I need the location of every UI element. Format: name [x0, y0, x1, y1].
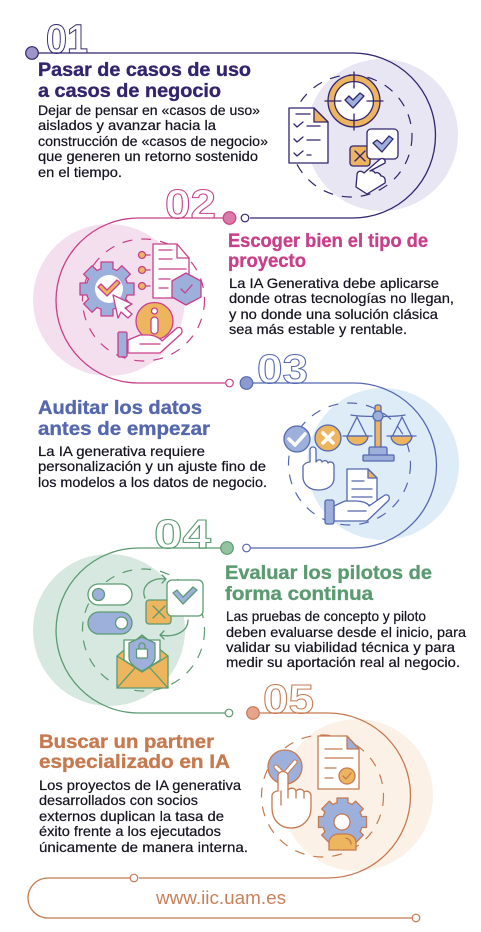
body text 5: únicamente de manera interna.: [39, 839, 248, 855]
body text 1: que generen un retorno sostenido: [38, 148, 258, 164]
end dot 3: [243, 544, 250, 552]
start dot 4: [221, 542, 233, 554]
body text 5: éxito frente a los ejecutados: [39, 823, 221, 839]
heading 3: [38, 397, 210, 440]
body text 5: desarrollados con socios: [39, 792, 198, 808]
body text 3: los modelos a los datos de negocio.: [38, 474, 267, 490]
panel: step 4: [33, 511, 466, 717]
body text 2: La IA Generativa debe aplicarse: [229, 275, 439, 291]
dashed ring 3: [288, 403, 410, 525]
icon: scales, approval buttons and document: [284, 405, 416, 524]
heading 2: [228, 230, 428, 272]
icon: target, checklist and hand: [289, 72, 398, 194]
heading 4: Evaluar los pilotos de: [225, 562, 432, 584]
connector line 4: [56, 548, 225, 713]
body text 4: Las pruebas de concepto y piloto: [226, 608, 426, 624]
body text 1: en el tiempo.: [38, 164, 122, 180]
frame dot left: [130, 874, 138, 882]
heading 1: [38, 59, 251, 102]
dashed ring 5: [262, 735, 384, 857]
body text 4: medir su aportación real al negocio.: [226, 654, 460, 670]
heading 2: proyecto: [228, 250, 306, 272]
background circle 5: [281, 719, 433, 871]
heading 2: Escoger bien el tipo de: [228, 230, 428, 252]
body text 4: validar su viabilidad técnica y para: [226, 639, 455, 655]
heading 4: [225, 562, 432, 605]
body text 1: Dejar de pensar en «casos de uso»: [38, 102, 260, 118]
heading 1: a casos de negocio: [38, 80, 221, 102]
body text 1: aislados y avanzar hacia la: [38, 117, 216, 133]
background circle 4: [33, 554, 185, 706]
body text 3: La IA generativa requiere: [38, 443, 205, 459]
icon: toggles, approval boxes and envelope: [88, 575, 203, 688]
number 04: 04: [154, 511, 211, 557]
panel: step 1: [26, 16, 458, 222]
number 01: 01: [46, 16, 88, 62]
end dot 2: [226, 379, 233, 387]
connector line 2: [56, 218, 225, 383]
connector line 1: [38, 53, 435, 218]
start dot 1: [26, 47, 38, 59]
body text 5: [39, 777, 248, 855]
number 05: 05: [263, 676, 314, 722]
heading 5: [39, 731, 230, 773]
background circle 3: [307, 388, 459, 540]
dashed ring 2: [82, 239, 204, 361]
dashed ring 4: [82, 569, 204, 691]
heading 1: Pasar de casos de uso: [38, 59, 251, 81]
start dot 3: [240, 377, 253, 389]
panel: step 3: [38, 346, 459, 552]
icon: pointing hand, document and gear: [268, 736, 366, 850]
website url: www.iic.uam.es: [155, 888, 286, 908]
body text 4: [226, 608, 466, 670]
heading 3: antes de empezar: [38, 418, 210, 440]
body text 1: construcción de «casos de negocio»: [38, 133, 268, 149]
body text 3: [38, 443, 267, 490]
frame dot right: [412, 914, 420, 922]
body text 4: deben evaluarse desde el inicio, para: [226, 624, 466, 640]
body text 1: [38, 102, 268, 180]
body text 2: sea más estable y rentable.: [229, 321, 407, 337]
panel: step 5: [39, 676, 433, 878]
frame line: [28, 878, 412, 918]
heading 4: forma continua: [225, 583, 373, 605]
start dot 2: [223, 212, 236, 224]
body text 2: [229, 275, 454, 337]
body text 2: donde otras tecnologías no llegan,: [229, 290, 454, 306]
connector line 3: [250, 383, 436, 548]
heading 5: especializado en IA: [39, 751, 230, 773]
background circle 1: [306, 59, 458, 211]
end dot 1: [241, 214, 249, 222]
number 02: 02: [165, 181, 216, 227]
heading 5: Buscar un partner: [39, 731, 214, 753]
body text 2: y no donde una solución clásica: [229, 306, 438, 322]
connector line 5: [139, 713, 410, 878]
footer: website frame: [28, 874, 420, 922]
heading 3: Auditar los datos: [38, 397, 202, 419]
panel: step 2: [33, 181, 454, 387]
dashed ring 1: [290, 75, 412, 197]
start dot 5: [247, 707, 259, 719]
number 03: 03: [257, 346, 308, 392]
end dot 4: [225, 709, 233, 717]
background circle 2: [33, 224, 185, 376]
body text 3: personalización y un ajuste fino de: [38, 458, 266, 474]
body text 5: externos duplican la tasa de: [39, 808, 224, 824]
body text 5: Los proyectos de IA generativa: [39, 777, 241, 793]
icon: gear, document, shield and hand: [80, 244, 201, 357]
